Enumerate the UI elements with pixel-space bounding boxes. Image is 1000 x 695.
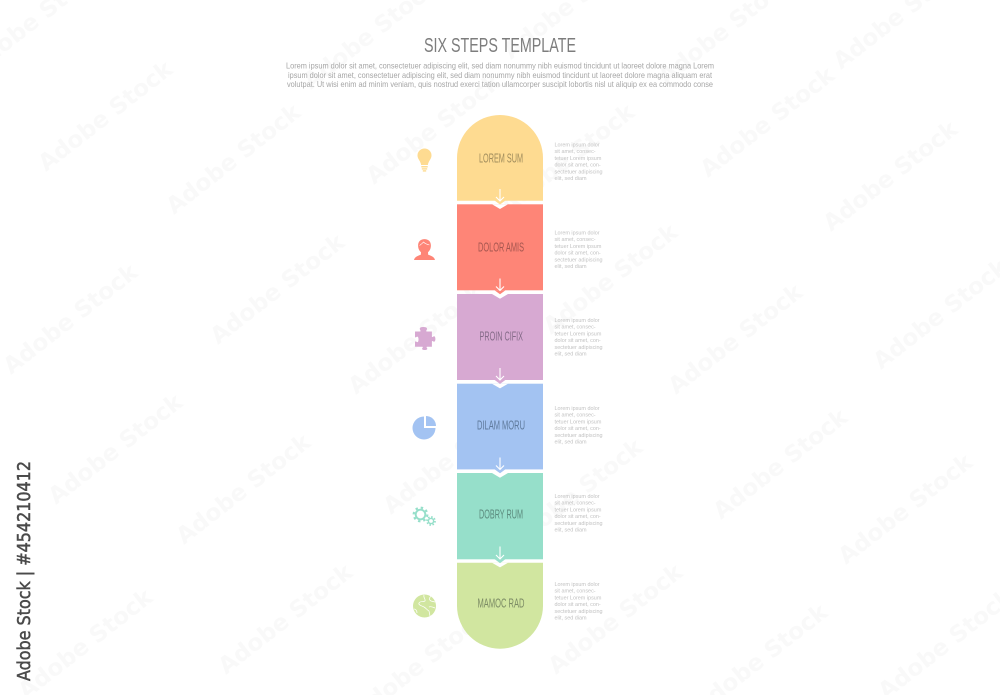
icon: gears [414,508,435,525]
side text: step 1: tetuer Lorem ipsum [554,156,602,162]
side text: step 2: elit, sed diam [554,264,587,270]
step 1: yellow rounded segment [457,115,543,201]
step 6: green rounded segment: MAMOC RAD [478,596,524,610]
step 1: yellow rounded segment: LOREM SUM [479,150,523,166]
side text: step 5: sit amet, consec- [554,501,596,507]
watermark pattern: Adobe Stock [0,259,143,380]
step 6: green rounded segment [457,563,543,649]
watermark pattern: Adobe Stock [539,219,683,340]
watermark pattern: Adobe Stock [696,62,840,183]
side text: step 1 [554,142,603,182]
step 2: red segment [457,204,543,290]
side text: step 1: elit, sed diam [554,176,587,182]
side text: step 6 [554,582,603,622]
icon: pie chart [412,416,436,440]
side text: step 5: sectetuer adipiscing [554,521,603,527]
side text: step 3: elit, sed diam [554,352,587,358]
step 4: blue segment [457,384,543,469]
watermark pattern: Adobe Stock [362,69,506,190]
arrow: step 2 to 3 [492,278,508,299]
side text: step 6: dolor sit amet, con- [554,602,601,608]
side text: step 2: Lorem ipsum dolor [554,230,600,236]
icon: globe [413,594,436,618]
icon: puzzle piece [415,327,435,350]
watermark pattern: Adobe Stock [162,99,306,220]
side text: step 3: Lorem ipsum dolor [554,318,600,324]
side text: step 1: dolor sit amet, con- [554,163,601,169]
intro paragraph [286,62,714,89]
side text: step 4: dolor sit amet, con- [554,426,601,432]
watermark pattern: Adobe Stock [709,404,853,525]
side text: step 4: sectetuer adipiscing [554,433,603,439]
side text: step 6: sectetuer adipiscing [554,609,603,615]
watermark pattern: Adobe Stock [834,449,978,570]
watermark pattern: Adobe Stock [544,559,688,680]
watermark pattern: Adobe Stock [379,399,523,520]
intro paragraph: volutpat. Ut wisi enim ad minim veniam, quis nostrud exerci tation ullamcorper suscipit lobortis nisl ut aliquip ex ea commodo conse [287,80,713,89]
side text: step 2: sit amet, consec- [554,237,596,243]
watermark pattern: Adobe Stock [819,116,963,237]
side text: step 1: sit amet, consec- [554,149,596,155]
watermark pattern: Adobe Stock [172,429,316,550]
side text: step 6: tetuer Lorem ipsum [554,596,602,602]
watermark pattern: Adobe Stock [44,389,188,510]
side text: step 4: sit amet, consec- [554,413,596,419]
side text: step 5: elit, sed diam [554,528,587,534]
side text: step 5 [554,494,603,534]
title: SIX STEPS TEMPLATE [424,34,576,57]
side text: step 5: Lorem ipsum dolor [554,494,600,500]
intro paragraph: ipsum dolor sit amet, consectetuer adipiscing elit, sed diam nonummy nibh euismod tincidunt ut laoreet dolore magna aliquam erat [288,71,713,80]
side text: step 3: dolor sit amet, con- [554,338,601,344]
arrow: step 5 to 6 [492,546,508,567]
arrow: step 4 to 5 [492,458,508,478]
watermark pattern: Adobe Stock [34,56,178,177]
step 3: purple segment [457,294,543,380]
side text: step 5: tetuer Lorem ipsum [554,508,602,514]
step 3: purple segment: PROIN CIFIX [480,328,523,344]
icon: light bulb [418,148,432,172]
side text: step 4: elit, sed diam [554,440,587,446]
arrow: step 1 to 2 [492,189,508,209]
side text: step 1: Lorem ipsum dolor [554,142,600,148]
step 2: red segment: DOLOR AMIS [478,240,524,254]
arrow: step 3 to 4 [492,368,508,388]
side text: step 3: tetuer Lorem ipsum [554,332,602,338]
step 5: teal segment [457,473,543,559]
watermark pattern: Adobe Stock [206,229,350,350]
side text: step 4 [554,406,603,446]
intro paragraph: Lorem ipsum dolor sit amet, consectetuer adipiscing elit, sed diam nonummy nibh euismod tincidunt ut laoreet dolore magna Lorem [286,62,714,70]
watermark pattern: Adobe Stock [504,434,648,555]
side text: step 6: Lorem ipsum dolor [554,582,600,588]
watermark pattern: Adobe Stock [664,279,808,400]
watermark pattern: Adobe Stock [496,99,640,220]
side text: step 3 [554,318,603,358]
side text: step 3: sit amet, consec- [554,325,596,331]
side text: step 2: tetuer Lorem ipsum [554,244,602,250]
stock id label: Adobe Stock | #454210412 [14,461,35,681]
side text: step 2 [554,230,603,270]
side text: step 4: Lorem ipsum dolor [554,406,600,412]
icon: person [414,239,435,260]
side text: step 2: dolor sit amet, con- [554,251,601,257]
watermark pattern: Adobe Stock [344,279,488,400]
step 5: teal segment: DOBRY RUM [479,506,523,522]
side text: step 4: tetuer Lorem ipsum [554,420,602,426]
side text: step 6: sit amet, consec- [554,589,596,595]
side text: step 5: dolor sit amet, con- [554,514,601,520]
side text: step 3: sectetuer adipiscing [554,345,603,351]
watermark pattern: Adobe Stock [214,559,358,680]
side text: step 2: sectetuer adipiscing [554,258,603,264]
side text: step 6: elit, sed diam [554,616,587,622]
step 4: blue segment: DILAM MORU [477,418,525,432]
side text: step 1: sectetuer adipiscing [554,170,603,176]
